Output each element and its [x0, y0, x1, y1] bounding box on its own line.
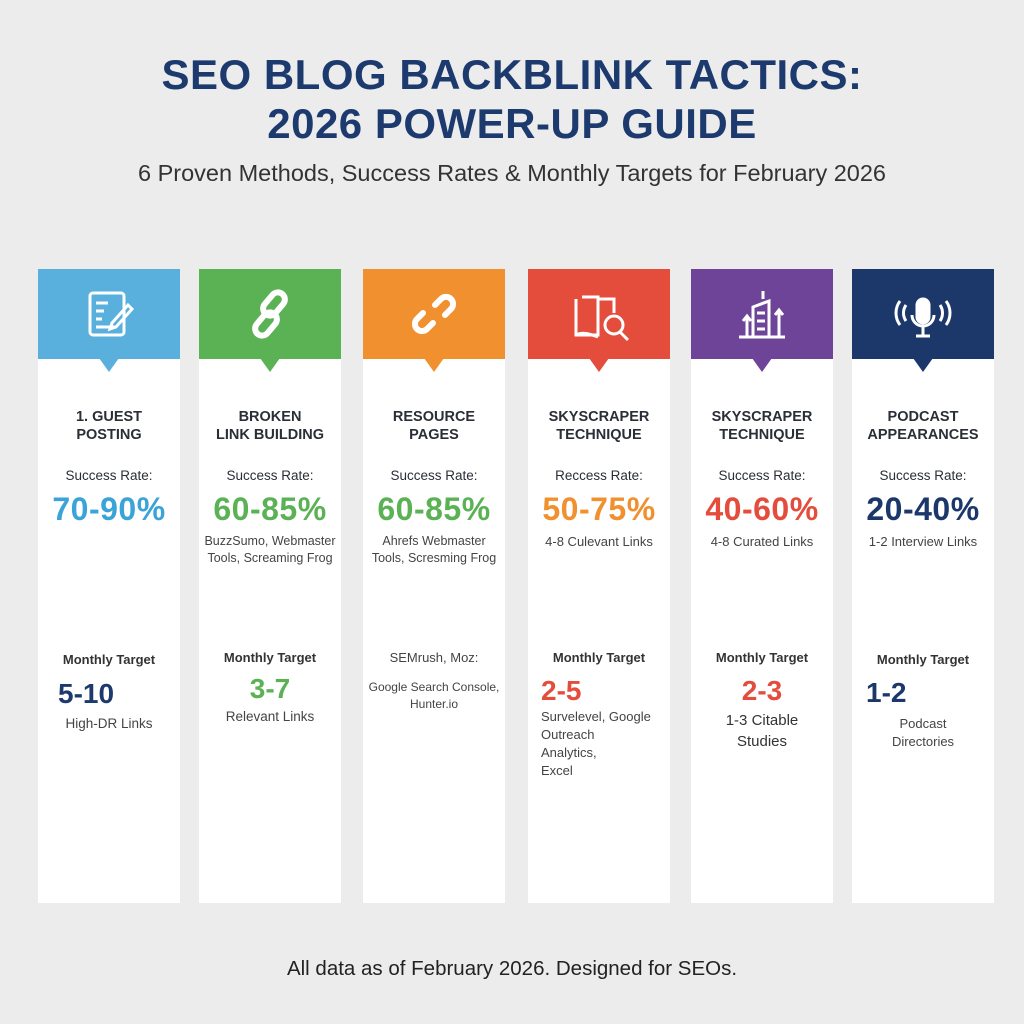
- panel: skyscraper technique purple: 1-3 Citable: [726, 712, 798, 729]
- panel: skyscraper technique red: SKYSCRAPER: [549, 409, 649, 425]
- panel: resource pages: RESOURCE: [393, 409, 475, 425]
- title: 2026 POWER-UP GUIDE: [267, 100, 757, 147]
- panel: resource pages: [363, 269, 505, 903]
- panel: skyscraper technique red: 4-8 Culevant Links: [545, 534, 653, 549]
- panel: skyscraper technique red: Excel: [541, 763, 573, 778]
- panel: skyscraper technique purple: Success Rate:: [718, 468, 806, 483]
- panel: podcast appearances: APPEARANCES: [867, 427, 979, 443]
- header: skyscraper red: [528, 269, 670, 359]
- text: guest posting: 1. GUEST: [76, 409, 142, 425]
- panel: skyscraper technique purple: Monthly Target: [716, 650, 808, 665]
- panel: podcast appearances: Directories: [892, 734, 954, 749]
- panel: skyscraper technique red: 50-75%: [542, 491, 656, 527]
- header: broken link: [199, 269, 341, 359]
- panel: skyscraper technique red: Monthly Target: [553, 650, 645, 665]
- panel: podcast appearances: Success Rate:: [879, 468, 967, 483]
- panel: resource pages: Success Rate:: [390, 468, 478, 483]
- panel: podcast appearances: Monthly Target: [877, 652, 969, 667]
- panel: resource pages: PAGES: [409, 427, 459, 443]
- panel: broken link building: Tools, Screaming Frog: [207, 551, 333, 565]
- header: skyscraper purple: [691, 269, 833, 359]
- panel: skyscraper technique red: Analytics,: [541, 745, 597, 760]
- header: guest posting: [38, 269, 180, 359]
- subtitle: 6 Proven Methods, Success Rates & Monthly Targets for February 2026: [138, 160, 886, 186]
- panel: resource pages: Ahrefs Webmaster: [382, 534, 486, 548]
- panel: podcast appearances: 1-2 Interview Links: [869, 534, 977, 549]
- panel: resource pages: 60-85%: [377, 491, 491, 527]
- panel: skyscraper technique red: Outreach: [541, 727, 594, 742]
- text: guest posting: [76, 409, 142, 443]
- panel: skyscraper technique red: Survelevel, Google: [541, 709, 651, 724]
- panel: podcast appearances: [852, 269, 994, 903]
- panel: resource pages: Google Search Console,: [369, 680, 499, 694]
- header: resource pages: [363, 269, 505, 359]
- panel: skyscraper technique purple: 4-8 Curated Links: [711, 534, 813, 549]
- panel: podcast appearances: PODCAST: [888, 409, 958, 425]
- panel: skyscraper technique purple: Studies: [737, 733, 787, 750]
- footer: All data as of February 2026. Designed for SEOs.: [287, 957, 737, 980]
- panel: broken link building: 60-85%: [213, 491, 327, 527]
- panel: resource pages: SEMrush, Moz:: [390, 650, 478, 665]
- panel: broken link building: Monthly Target: [224, 650, 316, 665]
- panel: podcast appearances: 20-40%: [866, 491, 980, 527]
- panel: resource pages: Tools, Scresming Frog: [372, 551, 496, 565]
- panel: broken link building: LINK BUILDING: [216, 427, 324, 443]
- title: SEO BLOG BACKBLINK TACTICS:: [161, 51, 863, 98]
- panel: podcast appearances: Podcast: [900, 716, 946, 731]
- panel: guest posting: 70-90%: [52, 491, 166, 527]
- panel: guest posting: Monthly Target: [63, 652, 155, 667]
- panel: skyscraper technique red: TECHNIQUE: [556, 427, 642, 443]
- panel: skyscraper technique red: [528, 269, 670, 903]
- panel: skyscraper technique purple: SKYSCRAPER: [712, 409, 812, 425]
- panel: resource pages: Hunter.io: [410, 697, 458, 711]
- panel: guest posting: High-DR Links: [65, 716, 153, 731]
- panel: broken link building: BuzzSumo, Webmaster: [204, 534, 336, 548]
- panel: guest posting: [38, 269, 180, 903]
- panel: broken link building: BROKEN: [239, 409, 301, 425]
- panel: broken link building: Success Rate:: [226, 468, 314, 483]
- panel: guest posting: Success Rate:: [65, 468, 153, 483]
- header: podcast: [852, 269, 994, 359]
- panel: broken link building: [199, 269, 341, 903]
- panel: skyscraper technique purple: 2-3: [742, 675, 782, 706]
- panel: broken link building: 3-7: [250, 673, 290, 704]
- panel: guest posting: 5-10: [58, 678, 114, 709]
- panel: skyscraper technique red: Reccess Rate:: [555, 468, 643, 483]
- panel: broken link building: Relevant Links: [226, 709, 314, 724]
- panel: skyscraper technique purple: TECHNIQUE: [719, 427, 805, 443]
- panel: skyscraper technique purple: 40-60%: [705, 491, 819, 527]
- panel: skyscraper technique red: 2-5: [541, 675, 581, 706]
- panel: skyscraper technique purple: [691, 269, 833, 903]
- panel: podcast appearances: 1-2: [866, 677, 906, 708]
- text: guest posting: POSTING: [76, 427, 142, 443]
- title: [161, 51, 863, 147]
